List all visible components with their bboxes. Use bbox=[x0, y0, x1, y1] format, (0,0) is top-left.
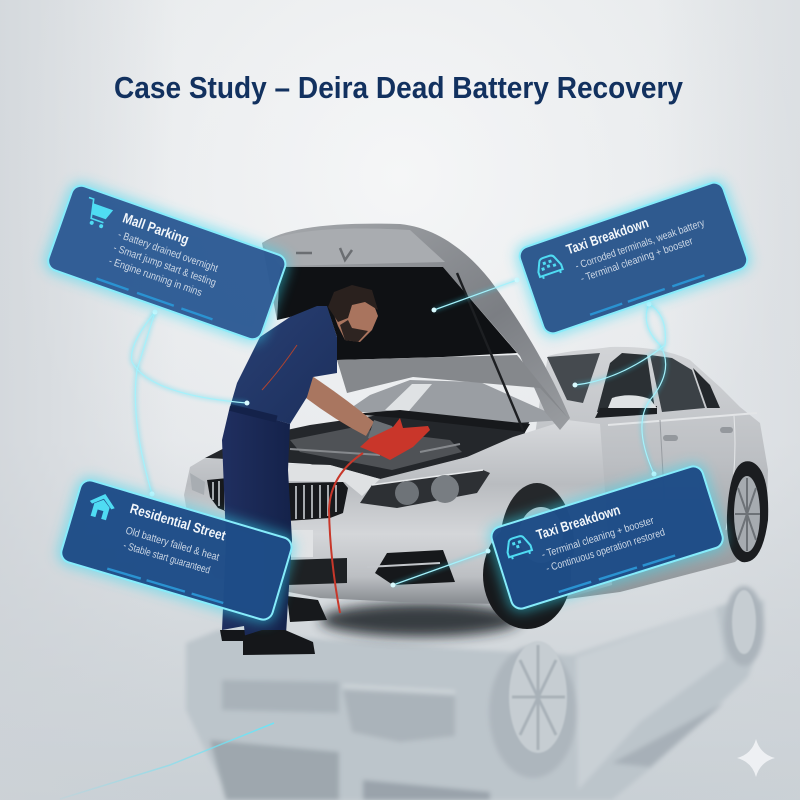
text block: - Smart jump start & testing bbox=[112, 242, 218, 289]
windshield bbox=[345, 380, 565, 424]
icon: sparkle bbox=[737, 739, 775, 777]
text block: Old battery failed & heat bbox=[124, 525, 221, 564]
text block: - Engine running in mins bbox=[107, 255, 204, 299]
engine bay bbox=[205, 412, 530, 480]
hair bbox=[328, 285, 378, 322]
panel: Taxi Breakdown top bbox=[512, 175, 755, 341]
heading: Taxi Breakdown bbox=[564, 214, 651, 257]
rear wheel bbox=[727, 461, 768, 562]
arm bbox=[306, 376, 374, 436]
shoe bbox=[243, 630, 315, 655]
left tyre bbox=[287, 596, 327, 622]
mechanic bbox=[220, 285, 430, 655]
floor shadow under car bbox=[320, 603, 520, 637]
left grille bbox=[207, 478, 228, 512]
red booster device bbox=[360, 418, 430, 460]
heading: Residential Street bbox=[128, 500, 228, 544]
lower grille bbox=[287, 558, 347, 585]
right grille bbox=[287, 482, 348, 521]
head bbox=[330, 300, 378, 342]
shirt bbox=[230, 306, 337, 424]
car reflection on floor bbox=[186, 586, 764, 800]
text block: - Terminal cleaning + booster bbox=[579, 235, 695, 285]
panel: Taxi Breakdown bottom bbox=[484, 459, 730, 616]
car cabin and side bbox=[530, 347, 768, 600]
heading: Taxi Breakdown bbox=[534, 501, 622, 543]
trousers bbox=[222, 406, 292, 636]
text block bbox=[107, 229, 222, 302]
panel: Residential Street bbox=[54, 473, 299, 627]
headlight bbox=[360, 470, 490, 508]
text block: - Corroded terminals, weak battery bbox=[574, 217, 707, 272]
text block: - Stable start guaranteed bbox=[122, 540, 212, 577]
red cable bbox=[329, 453, 363, 613]
title: Case Study – Deira Dead Battery Recovery bbox=[114, 70, 684, 105]
text block bbox=[120, 525, 221, 578]
car hood opened bbox=[262, 224, 570, 430]
rear shoe bbox=[220, 630, 246, 641]
front body bbox=[184, 420, 612, 604]
beard bbox=[340, 320, 368, 342]
text block: - Continuous operation restored bbox=[545, 526, 667, 575]
text block: - Terminal cleaning + booster bbox=[540, 514, 656, 561]
connector lines bbox=[131, 278, 666, 588]
fog intake bbox=[375, 550, 455, 585]
heading: Mall Parking bbox=[121, 209, 191, 247]
front wheel bbox=[483, 483, 574, 629]
icon: house bbox=[86, 490, 118, 522]
panel: Mall Parking bbox=[40, 178, 293, 347]
glove bbox=[368, 420, 398, 444]
light streak on floor bbox=[60, 723, 274, 799]
icon: taxi bbox=[535, 253, 564, 280]
number plate bbox=[290, 530, 313, 557]
text block: - Battery drained overnight bbox=[116, 229, 220, 275]
icon: shopping cart bbox=[81, 197, 114, 230]
car bbox=[184, 224, 768, 629]
icon: taxi bbox=[504, 534, 533, 560]
